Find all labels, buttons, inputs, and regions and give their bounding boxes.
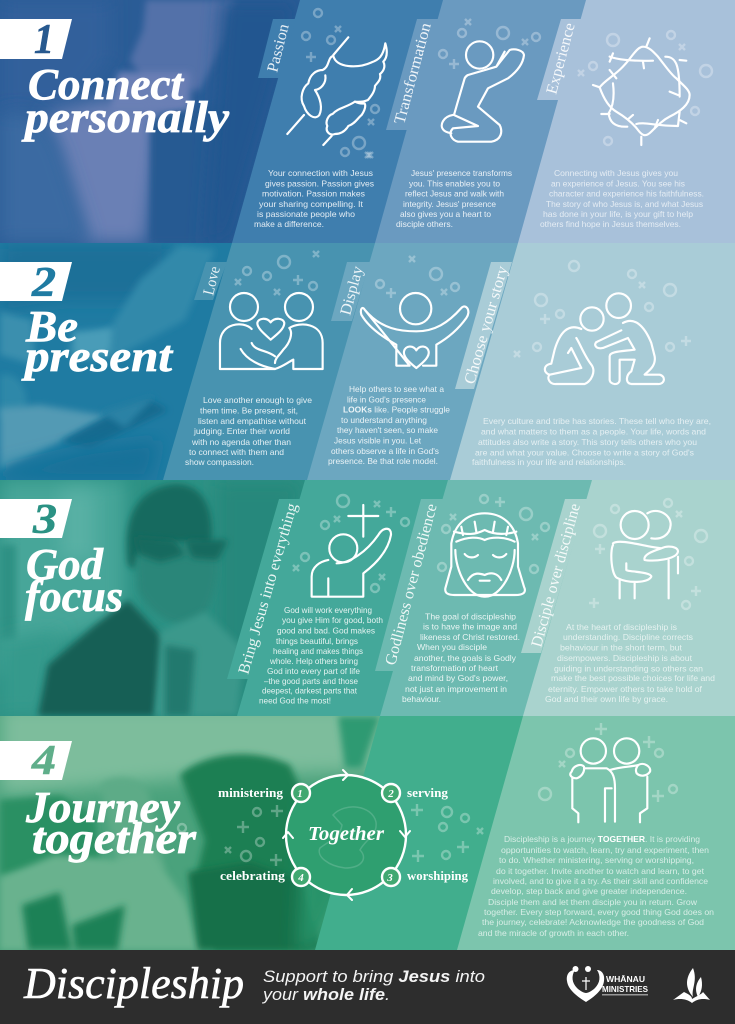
label: godliness over obedience: Godliness over obedience — [382, 502, 441, 667]
text: godliness: likeness of Christ restored. — [420, 632, 520, 642]
label: experience: Experience — [543, 21, 579, 96]
diagram: together cycle: worshiping — [407, 869, 469, 883]
text: love: listen and empathise without — [198, 416, 307, 426]
diagram: together cycle: ministering — [218, 786, 284, 800]
text: transformation — [396, 168, 512, 229]
text: bring jesus: things beautiful, brings — [276, 636, 358, 646]
panel: experience — [518, 0, 735, 243]
text: love: judging. Enter their world — [193, 426, 290, 436]
number tab 3 — [0, 497, 72, 543]
panel: disciple over discipline — [521, 480, 735, 716]
text: bring jesus: God into every part of life — [267, 666, 360, 676]
text: godliness: transformation of heart — [411, 663, 499, 673]
label: display: Display — [337, 264, 367, 317]
text: transformation: also gives you a heart to — [400, 209, 491, 219]
text: experience: character and experience his faithfulness. — [549, 188, 704, 198]
text: display: Jesus visible in you. Let — [334, 436, 422, 446]
panel: passion — [232, 0, 735, 243]
text: display: presence. Be that role model. — [328, 456, 438, 466]
logo: adventist flame and book — [673, 968, 710, 1003]
text: bring jesus: you give Him for good, both — [282, 615, 383, 625]
text: passion: make a difference. — [254, 219, 324, 229]
text: experience: The story of who Jesus is, and what Jesus — [546, 199, 703, 209]
text: journey together — [478, 834, 714, 938]
panel: godliness over obedience — [375, 480, 735, 716]
text: passion — [254, 168, 374, 229]
text: disciple over discipline: behaviour in the short term, but — [560, 642, 683, 652]
text: bring jesus: need God the most! — [259, 696, 331, 706]
panel: bring jesus into everything — [227, 480, 735, 716]
diagram: together cycle: serving — [407, 786, 449, 800]
icon: arm raised to cross — [312, 505, 391, 597]
text: godliness: another, the goals is Godly — [414, 653, 517, 663]
icon: open arms with heart — [361, 293, 468, 368]
text: journey together: do it together. Invite another to watch and learn, to get — [496, 866, 705, 876]
icon: kneeling people — [545, 293, 664, 384]
icon: two people hugging — [611, 511, 678, 598]
text: choose your story: attitudes also write a story. This story tells others who you — [478, 437, 697, 447]
text: experience: has done in your life, is your gift to help — [543, 209, 693, 219]
section 4: journey together — [0, 705, 735, 950]
heading: be present: Be — [25, 302, 78, 351]
text: journey together: the journey, celebrate! Acknowledge the goodness of God — [482, 917, 704, 927]
number tab 1: 1 — [34, 17, 54, 63]
text: love: them time. Be present, sit, — [200, 406, 298, 416]
icon: wings — [287, 37, 387, 145]
text: journey together: together. Every step forward, every good thing God does on — [484, 907, 714, 917]
text: journey together: develop, step back and give greater independence. — [491, 886, 687, 896]
text: passion: is passionate people who — [257, 209, 355, 219]
panel: transformation — [365, 0, 735, 243]
number tab 2: 2 — [31, 260, 56, 306]
panel: diagram background — [178, 716, 735, 950]
text: transformation: reflect Jesus and walk with — [405, 188, 504, 198]
heading: be present: present — [21, 332, 174, 381]
panel: journey together text — [457, 716, 735, 950]
text: disciple over discipline: God and their own life by grace. — [545, 694, 668, 704]
panel: love — [163, 243, 735, 480]
text: transformation: integrity. Jesus' presence — [403, 199, 496, 209]
diagram: together cycle: 1 — [297, 788, 303, 800]
diagram: together cycle — [218, 770, 469, 900]
footer tagline — [262, 967, 485, 1004]
photo: open bible and hands — [0, 243, 250, 480]
text: godliness: behaviour. — [402, 694, 441, 704]
text: godliness: The goal of discipleship — [425, 612, 516, 622]
diagram: together cycle: celebrating — [220, 869, 286, 883]
label: disciple over discipline: Disciple over discipline — [528, 502, 584, 649]
icon: two people arm in arm — [570, 738, 650, 822]
text: journey together: and the miracle of growth in each other. — [478, 928, 629, 938]
photo: woman praying — [0, 0, 320, 243]
text: journey together: opportunities to watch, learn, try and experiment, then — [501, 845, 709, 855]
text: bring jesus: –the good parts and those — [264, 676, 358, 686]
photo: man with glasses — [0, 480, 320, 716]
text: love — [185, 395, 312, 467]
text: transformation: you. This enables you to — [409, 178, 500, 188]
text: choose your story: are and what your value. Choose to write a story of God's — [475, 448, 694, 458]
heading: god focus: focus — [25, 572, 123, 621]
diagram: together cycle: 2 — [387, 788, 394, 800]
section 3: god focus — [0, 480, 735, 716]
text: choose your story: faithfulness in your life and relationships. — [472, 457, 626, 467]
label: passion: Passion — [264, 22, 293, 74]
number tab 3: 3 — [32, 497, 57, 543]
diagram: together cycle: 4 — [297, 872, 304, 884]
text: bring jesus — [259, 605, 383, 706]
text: journey together: to do. Whether ministering, serving or worshipping, — [499, 855, 694, 865]
text: experience: others find hope in Jesus themselves. — [540, 219, 681, 229]
text: journey together: involved, and to give it a try. As their skill and confidence — [493, 876, 708, 886]
logo: whanau ministries: WHĀNAU — [606, 975, 645, 984]
text: passion: Your connection with Jesus — [268, 168, 373, 178]
logo: whanau ministries: MINISTRIES — [602, 984, 648, 994]
text: love: to connect with them and — [189, 447, 284, 457]
text: transformation: disciple others. — [396, 219, 453, 229]
text: disciple over discipline: guiding in understanding so others can — [554, 664, 703, 674]
footer title: Discipleship — [23, 959, 244, 1008]
label: bring jesus into everything: Bring Jesus into everything — [236, 501, 301, 676]
heading: connect personally: Connect — [28, 60, 185, 109]
text: transformation: Jesus' presence transforms — [411, 168, 512, 178]
text: bring jesus: healing and makes things — [273, 646, 363, 656]
footer tagline: your whole life . — [262, 985, 390, 1004]
heading: be present — [21, 302, 174, 381]
heading: connect personally: personally — [21, 93, 229, 142]
text: journey together: Discipleship is a journey TOGETHER. It is providing — [504, 834, 700, 844]
text: display — [328, 384, 450, 466]
text: godliness — [402, 612, 520, 704]
text: godliness: not just an improvement in — [405, 684, 507, 694]
label: choose your story: Choose your story — [462, 264, 511, 386]
text: experience — [540, 168, 704, 229]
text: journey together: Disciple them and let them disciple you in return. Grow — [488, 897, 698, 907]
text: disciple over discipline: disempowers. Discipleship is about — [557, 653, 693, 663]
logo: whanau ministries — [567, 966, 648, 1002]
diagram: together cycle: 3 — [386, 872, 393, 884]
text: display: life in God's presence — [347, 394, 426, 404]
heading: god focus: God — [26, 540, 104, 589]
text: godliness: is to have the image and — [423, 622, 517, 632]
text: choose your story: Every culture and tribe has stories. These tell who they are, — [483, 416, 711, 426]
photo: friends embracing — [0, 705, 390, 950]
text: experience: an experience of Jesus. You see his — [551, 178, 685, 188]
text: disciple over discipline: At the heart of discipleship is — [566, 622, 677, 632]
text: love: show compassion. — [185, 457, 254, 467]
text: disciple over discipline: understanding. Discipline corrects — [563, 632, 693, 642]
text: display: others observe a life in God's — [331, 446, 439, 456]
number tab 4 — [0, 738, 72, 784]
text: disciple over discipline: make the best possible choices for life and — [551, 673, 715, 683]
footer tagline: Support to bring Jesus into — [263, 967, 485, 986]
text: disciple over discipline: eternity. Empower others to take hold of — [548, 684, 703, 694]
text: godliness: When you disciple — [417, 642, 487, 652]
text: disciple over discipline — [545, 622, 715, 704]
number tab 2 — [0, 260, 72, 306]
heading: journey together — [25, 783, 197, 863]
text: choose your story: and what matters to them as a people. Your life, words and — [481, 426, 706, 436]
text: passion: gives passion. Passion gives — [265, 178, 374, 188]
icon: two people with heart — [220, 293, 323, 369]
text: display: they haven't seen, so make — [337, 425, 438, 435]
icon: face of jesus — [445, 513, 525, 597]
panel: choose your story — [450, 243, 735, 480]
text: passion: motivation. Passion makes — [262, 188, 365, 198]
text: love: Love another enough to give — [203, 395, 312, 405]
icon: kneeling person — [442, 41, 524, 142]
label: transformation: Transformation — [391, 21, 435, 126]
text: love: with no agenda other than — [191, 437, 291, 447]
number tab 1 — [0, 17, 72, 63]
heading: journey together: together — [32, 814, 197, 863]
heading: connect personally — [21, 60, 229, 142]
footer band — [0, 950, 735, 1024]
text: bring jesus: whole. Help others bring — [269, 656, 358, 666]
heading: god focus — [25, 540, 123, 621]
diagram: together cycle: Together — [308, 823, 384, 845]
label: love: Love — [200, 265, 224, 297]
panel: display — [307, 243, 735, 480]
text: bring jesus: God will work everything — [284, 605, 372, 615]
text: bring jesus: good and bad. God makes — [277, 626, 375, 636]
icon: crown of thorns — [593, 38, 690, 145]
text: godliness: and mind by God's power, — [408, 673, 508, 683]
text: display: LOOKs like. People struggle — [343, 405, 450, 415]
text: display: to understand anything — [341, 415, 427, 425]
text: bring jesus: deepest, darkest parts that — [262, 686, 358, 696]
text: display: Help others to see what a — [349, 384, 444, 394]
text: experience: Connecting with Jesus gives you — [554, 168, 678, 178]
text: passion: your sharing compelling. It — [259, 199, 364, 209]
section 1: connect personally — [0, 0, 735, 243]
section 2: be present — [0, 243, 735, 480]
number tab 4: 4 — [31, 738, 56, 784]
text: choose your story — [472, 416, 711, 467]
heading: journey together: Journey — [25, 783, 180, 832]
